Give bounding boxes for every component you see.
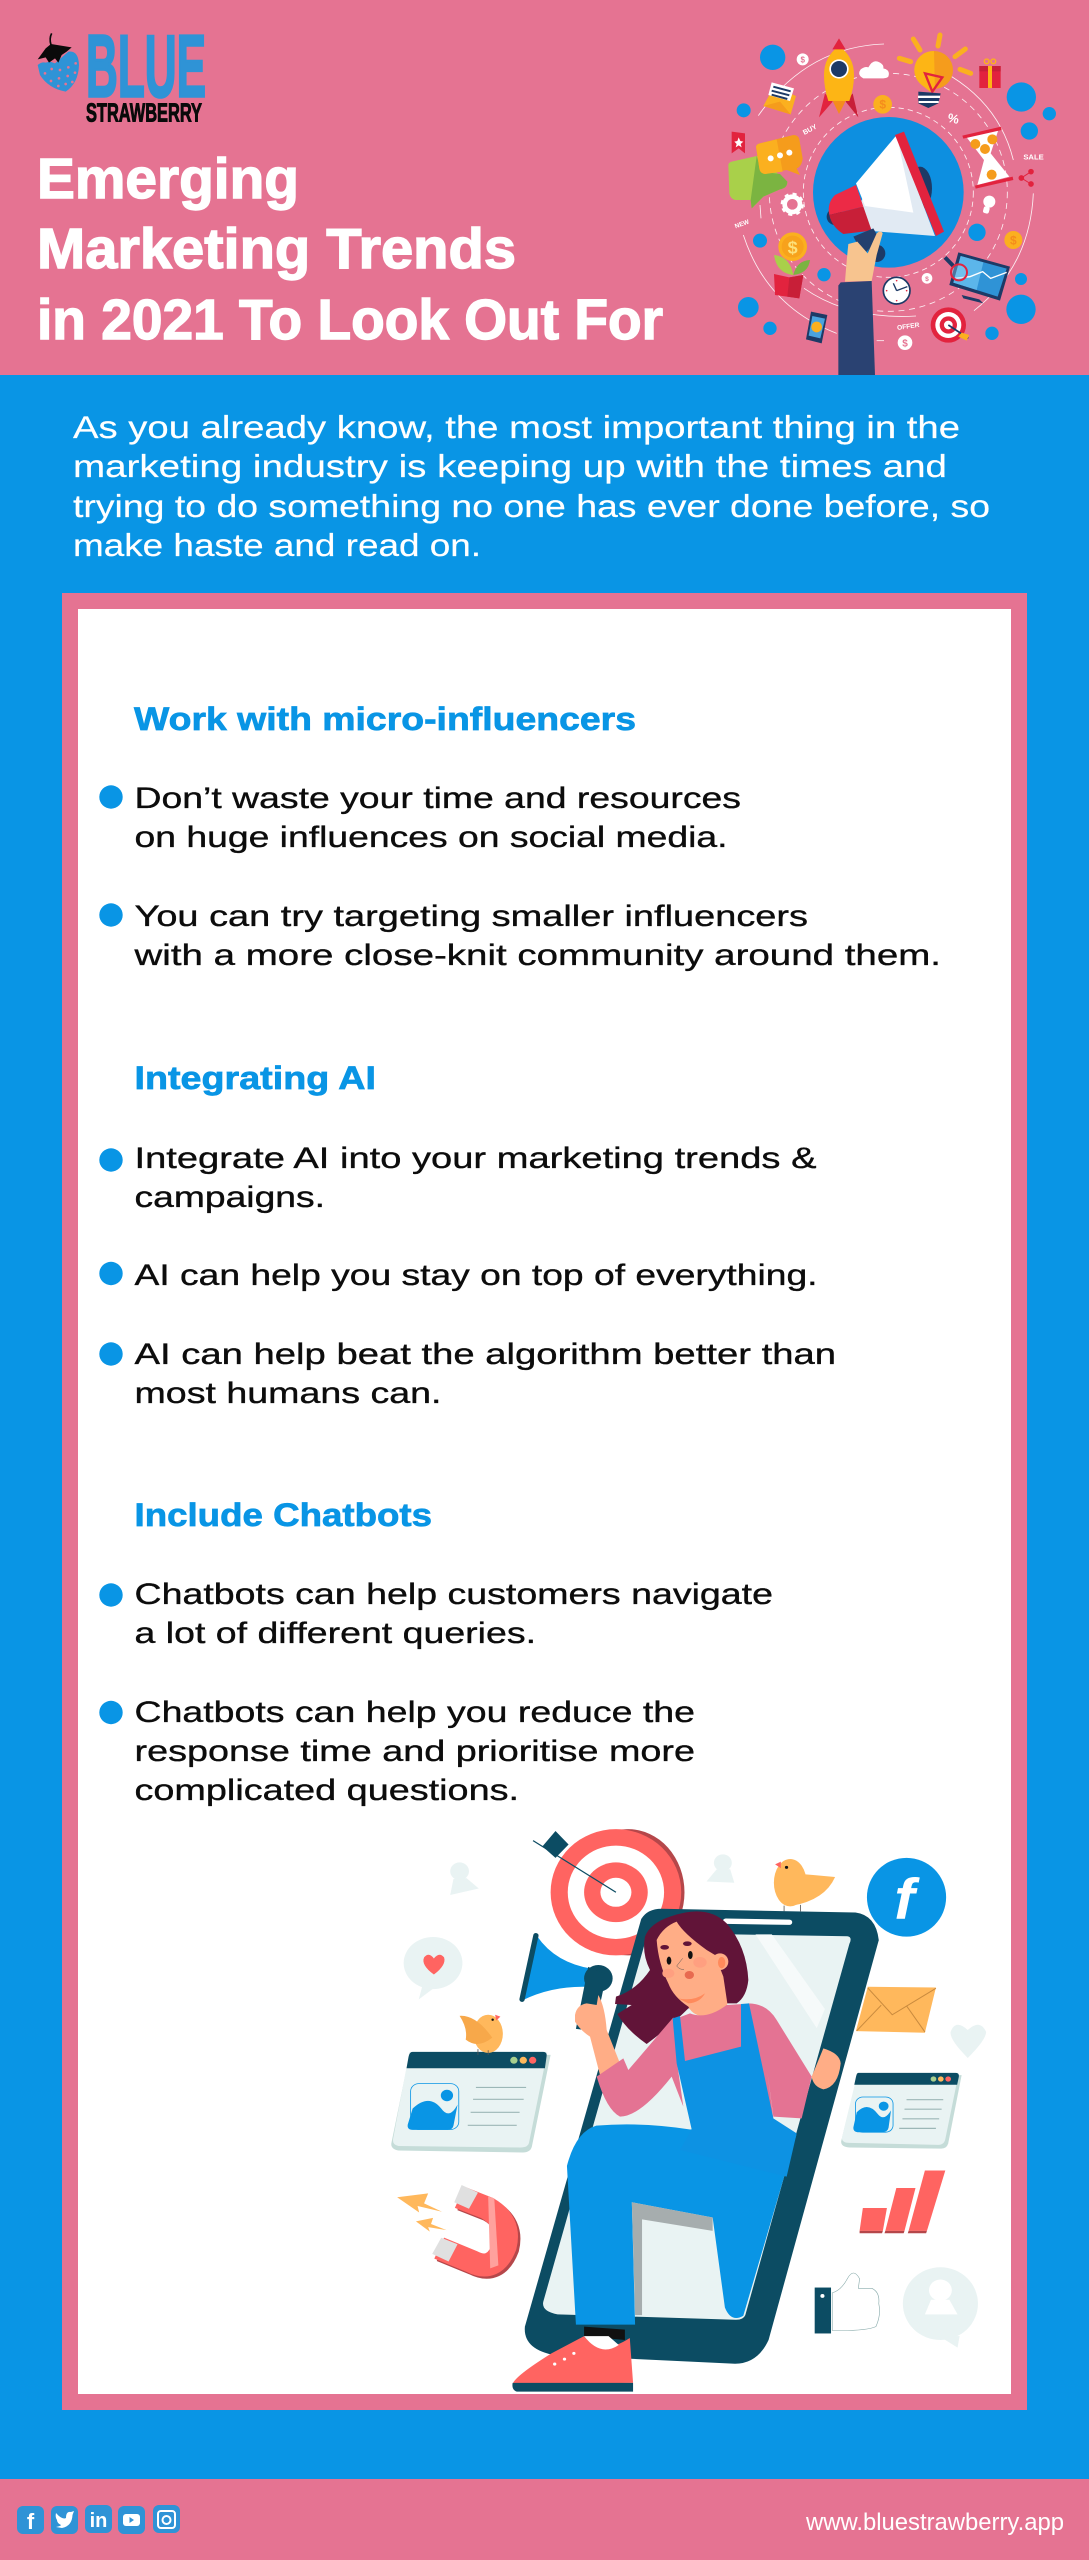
- bullet 2: with a more close-knit community around them.: [133, 939, 941, 972]
- intro paragraph: trying to do something no one has ever done before, so: [73, 488, 990, 524]
- icon: magnet: [432, 2185, 508, 2268]
- icon: envelope: [856, 1987, 936, 2033]
- bullet 3: most humans can.: [134, 1377, 442, 1410]
- labels around the orbit: SALE: [1023, 152, 1044, 161]
- megaphone: [522, 1936, 613, 2031]
- icon: facebook: f: [894, 1867, 920, 1932]
- icon: top bird: [774, 1859, 835, 1911]
- phone: [525, 1909, 879, 2364]
- right hand: [812, 2048, 841, 2089]
- title: Marketing Trends: [37, 217, 516, 281]
- website url: www.bluestrawberry.app: [805, 2509, 1064, 2536]
- decorative orbit rings: [743, 44, 1033, 341]
- icon: faded heart: [951, 2025, 986, 2058]
- icon: instagram: [153, 2505, 180, 2533]
- icon: coins: $: [902, 338, 908, 349]
- pink shirt: [597, 2003, 812, 2118]
- panel: main content frame: [62, 593, 1027, 2410]
- icon: small bulb: [983, 196, 995, 214]
- panel: header band: [0, 0, 1089, 375]
- icon: smartphone: [806, 312, 827, 343]
- intro paragraph: As you already know, the most important thing in the: [73, 409, 960, 445]
- section: Include Chatbots: [99, 1497, 773, 1807]
- bullet 1: Don’t waste your time and resources: [134, 782, 741, 815]
- icon: facebook: [17, 2506, 44, 2534]
- social icons: [17, 2505, 180, 2534]
- sock and shoe: [584, 2327, 625, 2340]
- labels around the orbit: %: [946, 111, 960, 127]
- woman: legs and shoe: [512, 1936, 796, 2392]
- title: Emerging: [37, 147, 299, 211]
- centre circle and megaphone: [813, 117, 964, 375]
- intro paragraph: [73, 409, 990, 563]
- icon: lightning bolts: [397, 2193, 447, 2232]
- blue overalls bib: [673, 2003, 797, 2177]
- left browser window: [391, 2052, 551, 2152]
- section: Work with micro-influencers: [99, 701, 941, 972]
- blue trousers: [567, 2119, 796, 2325]
- icon: coins: $: [1010, 233, 1017, 247]
- blue dots: [737, 45, 1056, 340]
- illustration: woman with megaphone in phone: [391, 1829, 986, 2392]
- icon: linkedin: in: [90, 2510, 107, 2532]
- section: Integrating AI: [99, 1060, 836, 1410]
- icon: heart bubble: [404, 1937, 462, 1999]
- woman: upper body: [575, 1911, 841, 2177]
- logo: Blue Strawberry: [38, 16, 206, 128]
- heading: Include Chatbots: [134, 1497, 432, 1533]
- icon: linkedin: [85, 2505, 112, 2533]
- heading: Work with micro-influencers: [134, 701, 636, 737]
- icon: analytics monitor: [945, 252, 1010, 303]
- illustration: marketing megaphone: [728, 35, 1056, 375]
- icon: rocket: [819, 38, 858, 117]
- icon: coins: [797, 53, 1022, 350]
- icon: coins: $: [879, 98, 886, 112]
- faded people icons: [450, 1854, 734, 1895]
- icon: strawberry: [38, 33, 79, 92]
- icon: target: [931, 307, 969, 343]
- face: [657, 1922, 728, 2017]
- icon: bookmark: [732, 132, 745, 153]
- heading: Integrating AI: [134, 1060, 376, 1096]
- icon: envelope: [763, 82, 796, 114]
- icon: money plant: $: [788, 237, 798, 257]
- bullet 2: [99, 900, 941, 972]
- bullet 2: You can try targeting smaller influencers: [134, 900, 808, 933]
- title: [37, 147, 663, 352]
- arm holding megaphone: [575, 1995, 619, 2075]
- hair: [615, 1911, 748, 2044]
- icon: facebook: f: [27, 2509, 35, 2534]
- bullet 1: Chatbots can help customers navigate: [134, 1578, 773, 1611]
- icon: cloud: [859, 61, 889, 78]
- icon: twitter: [51, 2506, 78, 2534]
- bullet 1: [99, 782, 741, 854]
- labels around the orbit: NEW: [734, 219, 750, 230]
- wordmark: BLUE: BLUE: [86, 16, 206, 116]
- icon: light bulb: [899, 35, 971, 108]
- wordmark: STRAWBERRY: STRAWBERRY: [86, 98, 202, 128]
- bullet 3: [99, 1338, 836, 1410]
- bullet 1: campaigns.: [134, 1181, 325, 1214]
- icon: facebook: [867, 1858, 946, 1937]
- bullet 1: [99, 1142, 817, 1214]
- bullet 2: AI can help you stay on top of everything.: [134, 1259, 818, 1292]
- bullet 2: [99, 1696, 695, 1807]
- icon: chat bubbles: [728, 135, 803, 208]
- icon: red bar chart: [860, 2170, 945, 2233]
- intro paragraph: marketing industry is keeping up with the times and: [73, 448, 947, 484]
- bullet 1: [99, 1578, 773, 1650]
- labels around the orbit: OFFER: [897, 322, 920, 332]
- icon: hourglass: [962, 127, 1013, 189]
- title: in 2021 To Look Out For: [37, 288, 663, 352]
- bullet 2: complicated questions.: [134, 1774, 519, 1807]
- bullet 3: AI can help beat the algorithm better than: [134, 1338, 836, 1371]
- intro paragraph: make haste and read on.: [73, 527, 481, 563]
- icon: gear: [782, 194, 803, 215]
- bullet 1: Integrate AI into your marketing trends &: [134, 1142, 817, 1175]
- left bird: [460, 2015, 503, 2055]
- icon: coins: $: [800, 55, 805, 64]
- target: [533, 1829, 684, 1955]
- labels around the orbit: [734, 111, 1044, 332]
- icon: youtube: [118, 2506, 145, 2534]
- icon: thumbs up: [815, 2273, 880, 2333]
- icon: coins: $: [925, 276, 929, 283]
- bullet 2: Chatbots can help you reduce the: [134, 1696, 695, 1729]
- icon: gift: [979, 59, 1001, 88]
- bullet 1: a lot of different queries.: [134, 1617, 536, 1650]
- bullet 2: response time and prioritise more: [134, 1735, 695, 1768]
- panel: footer band: [0, 2479, 1089, 2560]
- labels around the orbit: BUY: [802, 124, 819, 137]
- icon: money plant: [774, 232, 810, 298]
- icon: share: [1019, 169, 1033, 186]
- bullet 1: on huge influences on social media.: [134, 821, 728, 854]
- icon: clock: [883, 277, 910, 304]
- icon: person bubble: [903, 2267, 978, 2348]
- right browser window: [841, 2073, 962, 2149]
- chair shadow: [632, 2202, 713, 2315]
